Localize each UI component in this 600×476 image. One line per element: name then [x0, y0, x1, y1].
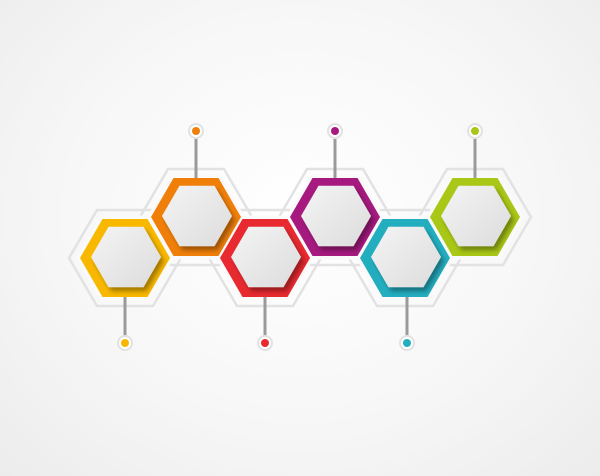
step 1: yellow hexagon: [80, 219, 170, 297]
background gray hex outlines: [69, 169, 531, 306]
marker dots: [118, 124, 482, 350]
connector stems: [125, 138, 475, 336]
step 5: teal hexagon: [360, 219, 450, 297]
step 6: green hexagon: [430, 178, 520, 256]
white halos: [76, 174, 524, 300]
step 2: orange hexagon: [151, 178, 241, 256]
step 4: purple hexagon: [290, 178, 380, 256]
step 3: red hexagon: [220, 219, 310, 297]
